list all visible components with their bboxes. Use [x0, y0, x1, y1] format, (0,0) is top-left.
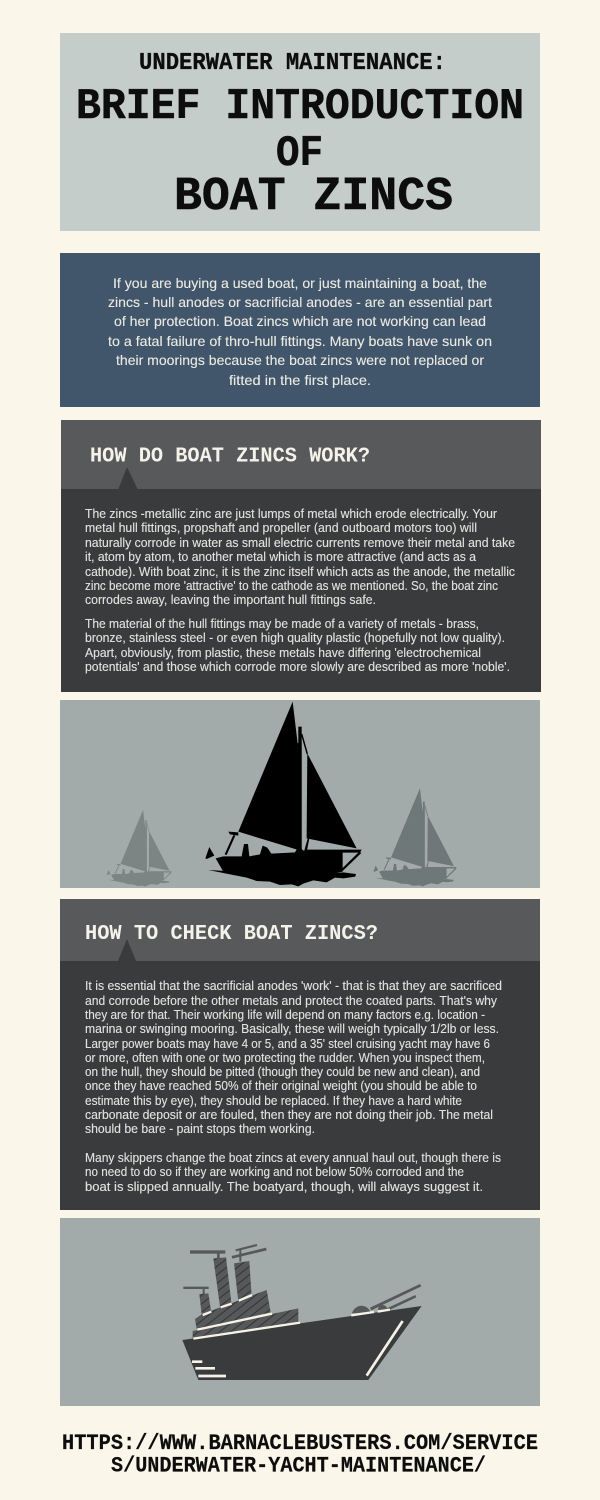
- panel: introduction: [60, 253, 540, 407]
- body text: Apart, obviously, from plastic, these metals have differing 'electrochemical: [85, 646, 481, 660]
- intro text: their moorings because the boat zincs were not replaced or: [116, 352, 484, 368]
- intro text: of her protection. Boat zincs which are not working can lead: [114, 313, 486, 329]
- footer url: [62, 1431, 538, 1478]
- body text: [85, 507, 515, 674]
- antennas: [183, 1244, 421, 1313]
- intro text: [108, 275, 492, 388]
- pointer triangle: [118, 939, 136, 961]
- footer url: S/UNDERWATER-YACHT-MAINTENANCE/: [111, 1454, 486, 1478]
- body text: and corrode before the other metals and protect the coated parts. That's why: [85, 994, 498, 1008]
- intro text: zincs - hull anodes or sacrificial anodes - are an essential part: [108, 294, 492, 310]
- body text: zinc become more 'attractive' to the cathode as we mentioned. So, the boat zinc: [85, 579, 498, 593]
- footer url: HTTPS://WWW.BARNACLEBUSTERS.COM/SERVICE: [62, 1431, 538, 1456]
- panel: how do boat zincs work: [61, 420, 541, 692]
- body text: [85, 979, 502, 1194]
- title line 2: OF: [276, 129, 323, 179]
- panel: ship image: [60, 1218, 540, 1406]
- icon: right small sailboat: [373, 788, 457, 886]
- body text: It is essential that the sacrificial anodes 'work' - that is that they are sacrificed: [85, 979, 502, 993]
- intro text: If you are buying a used boat, or just maintaining a boat, the: [113, 275, 487, 291]
- body text: no need to do so if they are working and not below 50% corroded and the: [85, 1165, 464, 1179]
- panel: sailboats image: [60, 700, 540, 888]
- hull: [182, 1306, 422, 1380]
- panel: how to check boat zincs: [60, 899, 540, 1210]
- body text: corrodes away, leaving the important hull fittings safe.: [85, 593, 376, 607]
- body text: or more, often with one or two protecting the rudder. When you inspect them,: [85, 1051, 485, 1065]
- body text: Many skippers change the boat zincs at every annual haul out, though there is: [85, 1151, 501, 1165]
- icon: main sailboat: [205, 702, 362, 886]
- body text: Larger power boats may have 4 or 5, and a 35' steel cruising yacht may have 6: [85, 1037, 490, 1051]
- title kicker: UNDERWATER MAINTENANCE:: [139, 50, 446, 77]
- body text: potentials' and those which corrode more slowly are described as more 'noble'.: [85, 660, 510, 674]
- heading: HOW DO BOAT ZINCS WORK?: [90, 444, 370, 468]
- body text: should be bare - paint stops them working.: [85, 1122, 315, 1136]
- body text: estimate this by eye), they should be replaced. If they have a hard white: [85, 1094, 462, 1108]
- body text: naturally corrode in water as small electric currents remove their metal and take: [85, 536, 515, 550]
- body text: The zincs -metallic zinc are just lumps of metal which erode electrically. Your: [85, 507, 497, 521]
- body text: boat is slipped annually. The boatyard, though, will always suggest it.: [85, 1180, 483, 1194]
- intro text: to a fatal failure of thro-hull fittings. Many boats have sunk on: [108, 333, 492, 349]
- body text: they are for that. Their working life will depend on many factors e.g. location -: [85, 1008, 485, 1022]
- body text: marina or swinging mooring. Basically, these will weigh typically 1/2lb or less.: [85, 1022, 499, 1036]
- title line 1: BRIEF INTRODUCTION: [76, 82, 524, 132]
- body text: carbonate deposit or are fouled, then they are not doing their job. The metal: [85, 1108, 493, 1122]
- icon: ship: [182, 1244, 422, 1380]
- body text: metal hull fittings, propshaft and propeller (and outboard motors too) will: [85, 521, 477, 535]
- body text: once they have reached 50% of their original weight (you should be able to: [85, 1079, 477, 1093]
- body text: it, atom by atom, to another metal which is more attractive (and acts as a: [85, 550, 476, 564]
- title line 3: BOAT ZINCS: [174, 171, 453, 224]
- body text: on the hull, they should be pitted (though they could be new and clean), and: [85, 1065, 480, 1079]
- superstructure: [193, 1257, 298, 1338]
- body text: The material of the hull fittings may be made of a variety of metals - brass,: [85, 617, 479, 631]
- white highlights: [192, 1295, 403, 1376]
- heading: HOW TO CHECK BOAT ZINCS?: [85, 922, 378, 946]
- pointer triangle: [118, 467, 138, 490]
- body text: cathode). With boat zinc, it is the zinc itself which acts as the anode, the metallic: [85, 565, 515, 579]
- intro text: fitted in the first place.: [229, 372, 371, 388]
- icon: left small sailboat: [107, 810, 172, 887]
- body text: bronze, stainless steel - or even high quality plastic (hopefully not low quality).: [85, 631, 505, 645]
- panel: title: [60, 33, 540, 231]
